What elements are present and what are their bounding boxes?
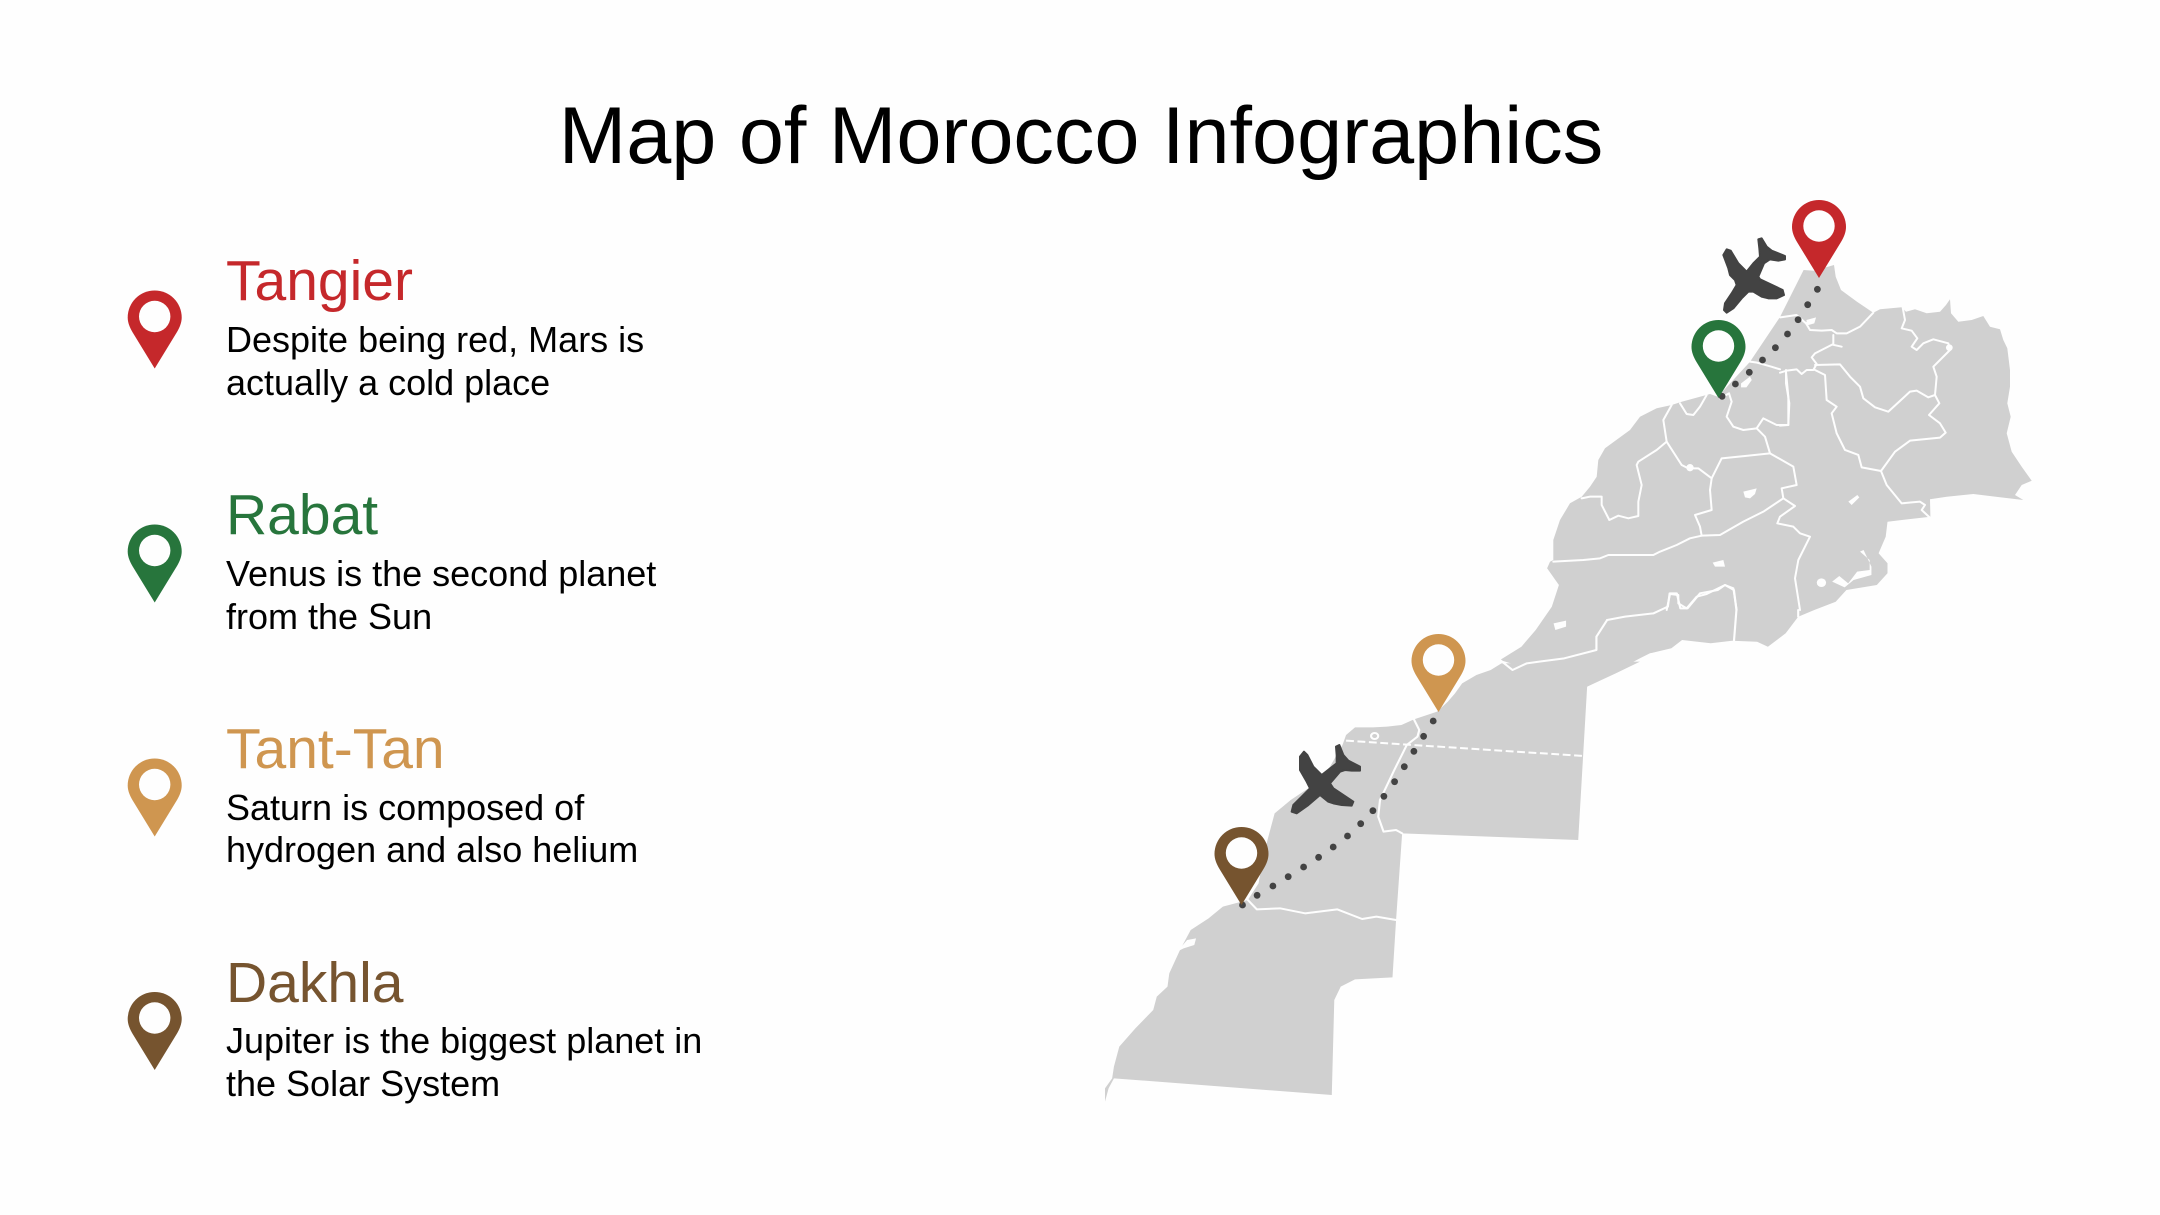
icon: airplane south: [1292, 745, 1360, 813]
heading: Rabat: Rabat: [226, 483, 378, 547]
list item: Tant-Tan: [128, 717, 638, 870]
map of Morocco: [1105, 265, 2032, 1102]
text: Tant-Tan description: Saturn is composed of: [226, 787, 585, 828]
pin: Tangier: [1792, 200, 1846, 278]
text: Rabat description: from the Sun: [226, 596, 432, 637]
text: Dakhla description: the Solar System: [226, 1063, 500, 1104]
map: north-west region borders: [1553, 370, 1810, 610]
title: Map of Morocco Infographics: [559, 91, 1603, 181]
text: Tangier description: actually a cold place: [226, 362, 550, 403]
heading: Dakhla: Dakhla: [226, 951, 404, 1015]
text: Tant-Tan description: hydrogen and also helium: [226, 829, 638, 870]
text: Tangier description: Despite being red, Mars is: [226, 319, 644, 360]
map: southern region: [1105, 662, 1640, 1102]
pin: Rabat: [1692, 320, 1746, 398]
list item: Dakhla: [128, 951, 702, 1104]
pin: Tant-Tan: [1412, 634, 1466, 712]
heading: Tant-Tan: Tant-Tan: [226, 717, 445, 781]
pin: Dakhla: [1214, 827, 1268, 905]
route: Tant-Tan to Dakhla: [1239, 718, 1437, 908]
icon: red pin: [128, 290, 182, 368]
text: Dakhla description: Jupiter is the biggest planet in: [226, 1020, 702, 1061]
map: southern Morocco borders and lakes: [1500, 315, 1871, 670]
text: Rabat description: Venus is the second planet: [226, 553, 656, 594]
icon: tan pin: [128, 758, 182, 836]
list item: Rabat: [128, 483, 656, 637]
map: north-east region borders: [1780, 307, 1953, 518]
icon: airplane north: [1723, 238, 1785, 313]
map: northern land mass: [1500, 265, 2032, 687]
route: Tangier to Rabat: [1719, 286, 1821, 400]
heading: Tangier: Tangier: [226, 249, 413, 313]
icon: green pin: [128, 524, 182, 602]
list item: Tangier: [128, 249, 644, 403]
icon: brown pin: [128, 992, 182, 1070]
